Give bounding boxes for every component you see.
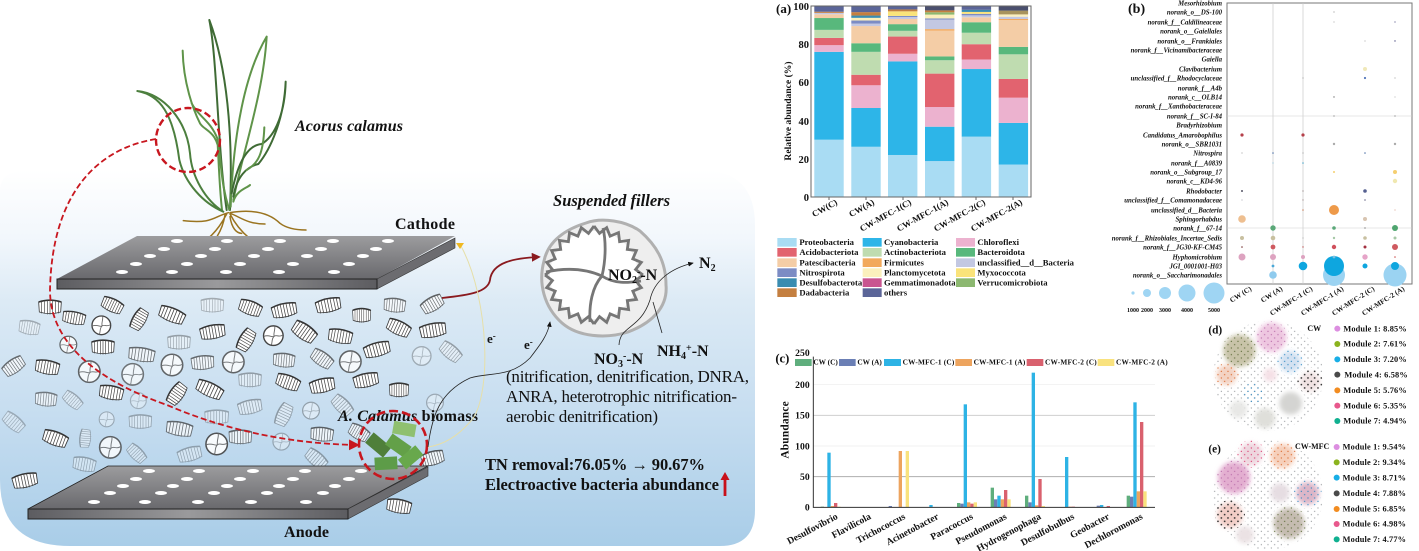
legend: phyla: Nitrospirota [799,267,845,277]
legend: phyla: Bacteroidota [977,247,1025,257]
genus labels: unclassified_f__Rhodocyclaceae [1131,76,1222,82]
text block: TN removal: Electroactive bacteria abundance [485,475,719,494]
legend: CW modules: Module 7: 4.94% [1343,417,1407,426]
axes frame [811,6,1031,200]
background panel: wetland water [0,170,755,546]
icon: red up arrow [720,472,730,496]
genus labels: norank_o__DS-100 [1167,10,1223,16]
x axis labels: CW-MFC-1(C) [858,197,913,234]
y axis numbers [795,348,810,514]
panel label d: (d) [1208,324,1222,336]
genus labels: Nitrospira [1192,150,1223,158]
legend: samples: CW-MFC-2 (C) [1045,358,1097,367]
genus labels: norank_c__KD4-96 [1166,178,1223,186]
legend: CW-MFC modules: Module 7: 4.77% [1343,535,1406,544]
size legend [1127,282,1224,314]
legend: CW-MFC modules: Module 2: 9.34% [1343,458,1406,467]
genus labels: norank_o__Gaiellales [1160,28,1222,36]
legend: phyla: Chloroflexi [977,237,1020,247]
anode plate [28,466,428,519]
label CW: CW [1307,324,1321,333]
text block: TN removal [485,455,719,494]
legend: phyla: Desulfobacterota [799,277,863,287]
x axis labels: CW (A) [1259,285,1285,304]
legend: samples: CW-MFC-1 (A) [974,358,1026,367]
legend: phyla: Firmicutes [884,257,925,267]
genus labels: norank_c__OLB14 [1168,94,1223,102]
genus labels: unclassified_d__Bacteria [1151,208,1223,214]
label: electron left: e [487,331,493,346]
y axis numbers: 250 [795,348,810,359]
legend: CW modules: Module 1: 8.85% [1343,324,1407,333]
label: NH4-N: 4 [681,351,686,362]
label: NO3-N: 3 [618,359,623,370]
label: Anode: Anode [284,524,329,541]
y axis numbers: 100 [795,441,810,452]
x axis genus labels [785,511,1145,551]
label: electron right: e [524,337,530,352]
network dots [1213,320,1324,431]
legend: CW-MFC modules: Module 1: 9.54% [1343,443,1406,452]
arrow: electron path to cathode [428,243,485,447]
genus labels: norank_o__Saccharimonadales [1133,272,1222,280]
x axis genus labels: Trichococcus [855,511,908,546]
x axis genus labels: Dechloromonas [1083,511,1145,551]
panel label e: (e) [1208,443,1221,455]
legend: phyla: Dadabacteria [799,287,850,297]
legend: samples: CW (A) [857,358,882,367]
legend: phyla: Patescibacteria [799,257,856,267]
icon: enlarged suspended filler [542,220,666,336]
arrow: electron path to filler [428,322,550,447]
panel (b): bubble chart of genera [1112,0,1412,317]
size legend: 5000 [1208,308,1220,314]
x axis genus labels: Desulfobulbus [1019,511,1077,549]
genus labels: norank_f__Vicinamibacteraceae [1131,48,1222,54]
x axis labels: CW-MFC-2(A) [969,197,1024,234]
y axis numbers: 40 [798,117,809,128]
cathode plate [57,236,455,289]
panel (d): CW co-occurrence network [1208,320,1408,431]
y axis numbers: 0 [805,503,810,514]
legend: phyla: Acidobacteriota [799,247,859,257]
legend: phyla: Proteobacteria [799,237,855,247]
x axis labels: CW-MFC-1 (A) [1300,285,1346,317]
x axis labels: CW-MFC-1(A) [895,197,950,234]
y axis numbers [793,2,809,204]
suspended filler carriers [0,293,464,490]
x axis labels: CW(A) [847,197,876,219]
label: NO2-N: NO [608,267,632,284]
genus labels: norank_f__A0839 [1171,160,1223,168]
label: Acorus calamus: Acorus calamus [294,118,403,135]
y axis title: Relative abundance (%) [783,61,794,161]
axes [813,357,1155,507]
genus labels [1112,0,1223,280]
x axis genus labels: Paracoccus [929,511,975,543]
cylinder below anode [386,498,412,516]
genus labels: norank_f__Xanthobacteraceae [1135,104,1222,110]
x axis genus labels: Desulfovibrio [785,511,840,547]
legend: phyla: Planctomycetota [884,267,946,277]
legend: CW modules: Module 2: 7.61% [1343,340,1407,349]
legend: CW modules: Module 5: 5.76% [1343,386,1407,395]
x axis labels: CW-MFC-2(C) [932,197,987,234]
label: NH4-N: -N [692,343,709,360]
panel label c: (c) [775,352,789,366]
legend: phyla [777,237,1075,297]
x axis genus labels: Flavilicola [830,511,873,541]
x axis labels: CW-MFC-1 (C) [1269,285,1315,317]
arrow: dashed biomass transfer curve [50,139,358,445]
panel label a: (a) [776,1,791,16]
label: NO2-N: - [637,267,640,278]
genus labels: norank_f__SC-I-84 [1167,114,1223,120]
x axis labels [810,197,1024,234]
genus labels: Candidatus_Amarobophilus [1143,132,1222,140]
genus labels: Sphingorhabdus [1176,216,1222,224]
genus labels: Hyphomicrobium [1172,254,1222,262]
x axis labels: CW (C) [1228,285,1254,304]
label: Cathode: Cathode [395,216,455,233]
legend: phyla: Myxococcota [977,267,1027,277]
label: A. Calamus biomass: A. Calamus biomass [337,408,478,425]
y axis numbers: 100 [793,2,809,13]
y axis title: Abundance [780,401,792,459]
network dots [1213,439,1323,550]
y axis numbers: 60 [798,78,809,89]
label: N2: N [699,255,711,272]
genus labels: Gaiella [1202,56,1223,64]
label: electron left: - [493,331,496,341]
label: NH4-N: NH [657,343,681,360]
plant: Acorus calamus [137,20,306,250]
text block: nitrogen pathways: ANRA, heterotrophic nitrification- [506,387,737,406]
legend: phyla: Actinobacteriota [884,247,947,257]
legend: CW-MFC modules: Module 4: 7.88% [1343,489,1406,498]
text block: TN removal: TN removal:76.05% → 90.67% [485,455,705,474]
panel (a): stacked bar chart of phyla [776,1,1075,297]
legend: CW-MFC modules: Module 3: 8.71% [1343,473,1406,482]
panel (e): CW-MFC co-occurrence network [1208,439,1406,550]
legend: CW modules: Module 4: 6.58% [1344,370,1408,379]
axes frame [1227,3,1412,284]
legend: samples: CW-MFC-1 (C) [903,358,955,367]
genus labels: norank_f__A4b [1178,86,1223,92]
genus labels: Rhodobacter [1185,188,1222,196]
genus labels: norank_o__SBR1031 [1162,142,1222,148]
y axis numbers: 200 [795,380,810,391]
y axis numbers: 20 [798,155,809,166]
label: NO3-N: NO [594,351,618,368]
x axis labels [1228,285,1407,317]
legend: CW-MFC modules: Module 6: 4.98% [1343,520,1406,529]
bubbles [1238,11,1406,287]
grid lines [813,475,1155,478]
legend: CW modules [1334,324,1408,426]
y axis numbers: 50 [800,472,810,483]
x axis genus labels: Pseudomonas [954,511,1009,547]
genus labels: norank_f__Rhizobiales_Incertae_Sedis [1112,236,1222,242]
text block: nitrogen pathways: aerobic denitrification) [506,407,658,426]
genus labels: norank_o__Frankiales [1157,38,1222,46]
arrow: filler to suspended filler detail [442,257,539,298]
legend: phyla: Gemmatimonadota [884,277,956,287]
label: N2: 2 [711,263,716,274]
legend: phyla: unclassified__d__Bacteria [977,257,1075,267]
genus labels: norank_o__Subgroup_17 [1150,170,1223,176]
legend: CW modules: Module 3: 7.20% [1343,355,1407,364]
genus labels: Bradyrhizobium [1175,122,1222,130]
size legend: 2000 [1141,308,1153,314]
genus labels: Mesorhizobium [1177,0,1222,8]
genus labels: norank_f__JG30-KF-CM45 [1143,244,1223,252]
x axis labels: CW-MFC-2 (C) [1331,285,1377,317]
legend: CW-MFC modules [1334,443,1406,544]
x axis labels: CW-MFC-2 (A) [1361,285,1407,317]
legend: phyla: Verrucomicrobiota [977,277,1048,287]
label CW-MFC: CW-MFC [1295,442,1330,451]
text block: nitrogen pathways: (nitrification, denitrification, DNRA, [506,367,749,386]
genus labels: unclassified_f__Comamonadaceae [1124,198,1222,204]
legend: samples: CW-MFC-2 (A) [1116,358,1168,367]
panel (c): grouped bar chart of electroactive genera [775,348,1168,551]
size legend: 3000 [1159,308,1171,314]
y axis numbers: 150 [795,411,810,422]
label: NO3-N: - [623,351,626,362]
legend: samples [795,358,1168,367]
label: electron right: - [530,337,533,347]
size legend: 4000 [1181,308,1193,314]
label: NH4-N: + [686,343,692,354]
y axis numbers: 80 [798,40,809,51]
legend: samples: CW (C) [813,358,838,367]
label: NO3-N: -N [626,351,644,368]
size legend: 1000 [1127,308,1139,314]
panel label b: (b) [1128,2,1145,17]
text block: nitrogen pathways [506,367,749,426]
stacked bars [814,6,1028,197]
bars [821,373,1147,507]
genus labels: norank_f__67-14 [1173,226,1223,232]
label: NO2-N: -N [640,267,658,284]
genus labels: JGI_0001001-H03 [1168,264,1223,270]
genus labels: norank_f__Caldilineaceae [1148,20,1222,26]
y axis numbers: 0 [804,193,809,204]
dashed circle on leaf [156,108,220,172]
x axis labels: CW(C) [810,197,839,219]
label: NO2-N: 2 [632,275,637,286]
legend: CW modules: Module 6: 5.35% [1343,401,1407,410]
line: ammonium pointer [653,302,662,333]
arrow: nitrogen conversion to N2 [619,263,693,345]
legend: phyla: Cyanobacteria [884,237,939,247]
x axis genus labels: Geobacter [1068,511,1112,541]
x axis genus labels: Acinetobacter [884,511,941,548]
legend: CW-MFC modules: Module 5: 6.85% [1343,505,1406,514]
genus labels: Clavibacterium [1179,66,1222,74]
icon: A. calamus biomass blocks [365,421,423,470]
label: Suspended fillers: Suspended fillers [553,191,670,210]
legend: phyla: others [884,287,908,297]
dashed circle on biomass [359,411,427,479]
